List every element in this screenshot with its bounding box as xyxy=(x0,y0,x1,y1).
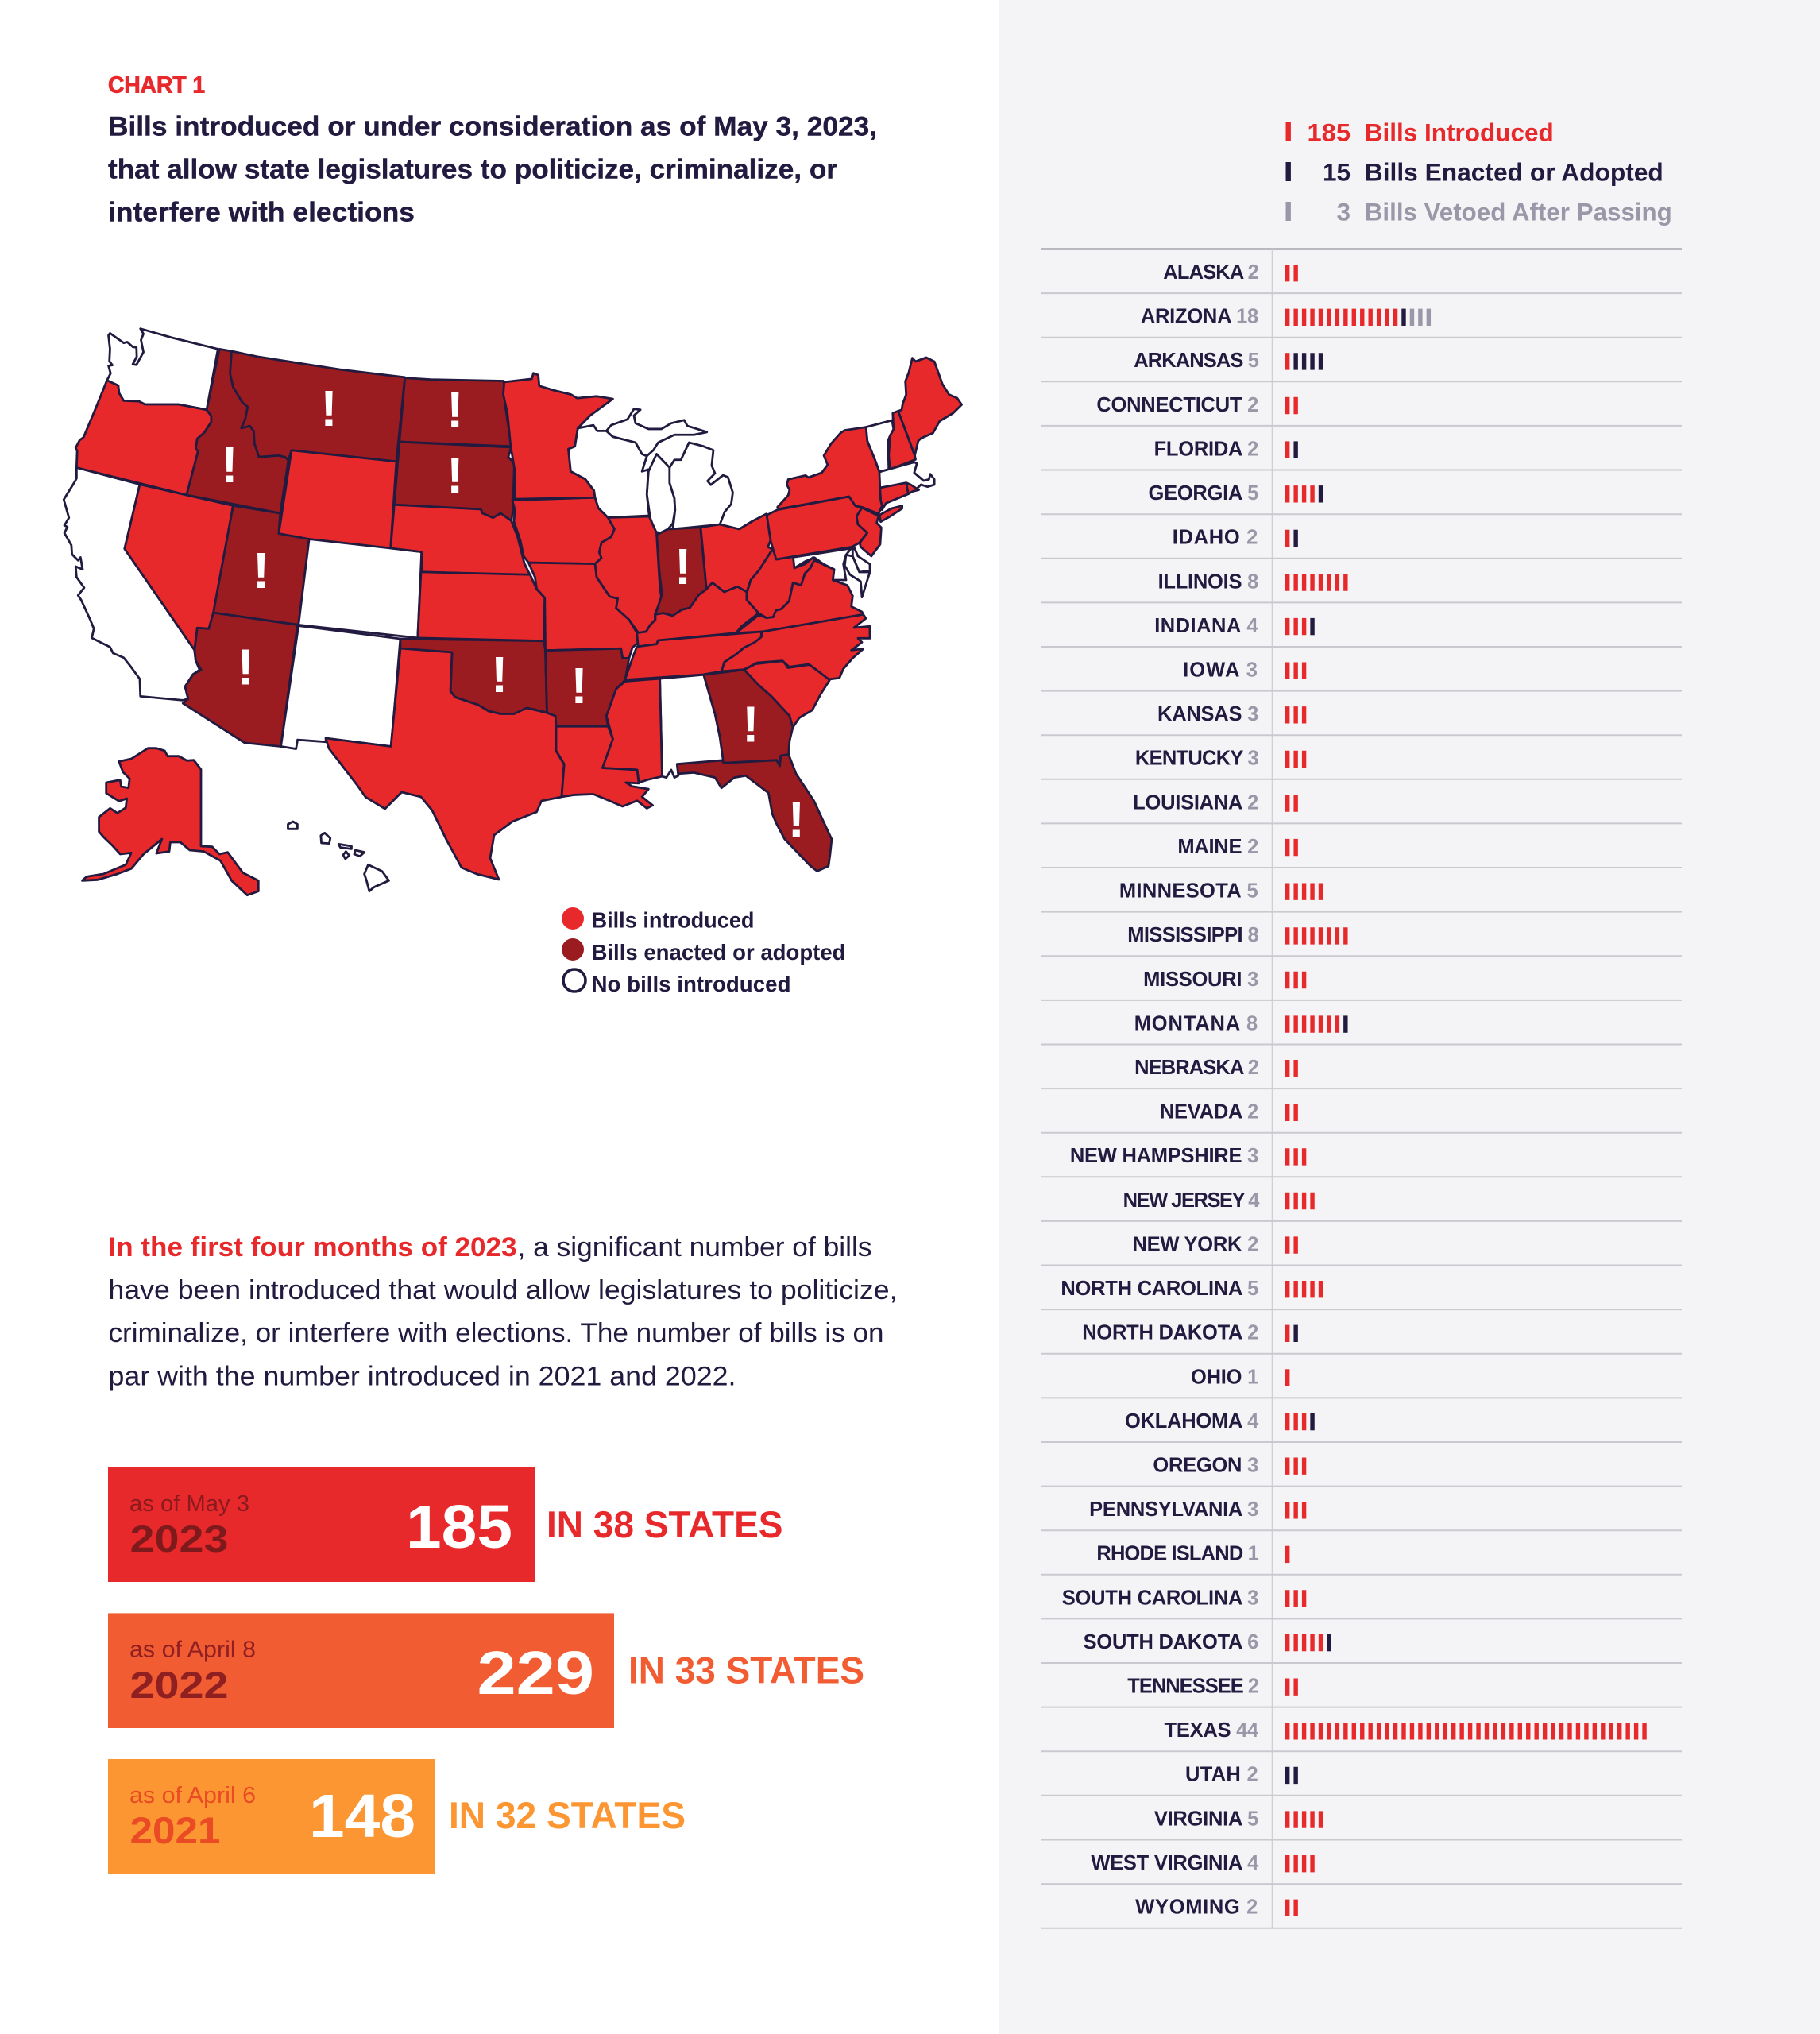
bar: 2021: as of April 6 xyxy=(129,1783,256,1808)
state: Nebraska xyxy=(391,505,530,575)
exclamation marks on enacted states: ! xyxy=(221,436,238,493)
bar: 2021: 2021 xyxy=(130,1809,221,1851)
map legend xyxy=(562,907,845,996)
northeastern states xyxy=(767,358,962,559)
state: Massachusetts xyxy=(879,462,934,490)
bar: 2022: 2022 xyxy=(130,1664,229,1706)
row: Virginia: VIRGINIA 5 xyxy=(1154,1808,1258,1830)
state: New York, Long Island xyxy=(879,506,902,522)
row: Arkansas: ARKANSAS 5 xyxy=(1134,350,1259,372)
exclamation marks on enacted states: ! xyxy=(320,380,338,437)
legend: bills vetoed after passing: Bills Vetoed After Passing xyxy=(1365,198,1672,226)
state: Illinois xyxy=(595,516,662,633)
state: Pennsylvania xyxy=(767,497,867,559)
state: North Carolina xyxy=(721,614,870,679)
row: New Jersey: NEW JERSEY 4 xyxy=(1123,1189,1260,1212)
state: Washington xyxy=(107,329,218,410)
legend: bills enacted or adopted: 15 xyxy=(1323,158,1351,187)
row: Minnesota: MINNESOTA 5 xyxy=(1119,880,1258,903)
western states xyxy=(64,329,547,749)
US map xyxy=(64,329,962,895)
state: California xyxy=(64,468,199,700)
row: Arizona: ARIZONA 18 xyxy=(1141,306,1258,328)
state: Texas xyxy=(326,648,564,880)
row: Montana: MONTANA 8 xyxy=(1134,1012,1258,1034)
row: South Dakota: SOUTH DAKOTA 6 xyxy=(1084,1631,1258,1653)
state: West Virginia xyxy=(747,550,824,618)
state: Nevada xyxy=(125,485,233,650)
state: Wyoming xyxy=(279,450,396,548)
exclamation marks on enacted states: ! xyxy=(491,646,508,703)
legend: bills introduced: Bills introduced xyxy=(591,908,755,933)
state: Rhode Island xyxy=(906,483,919,494)
legend: bills introduced: 185 xyxy=(1308,118,1351,147)
row: South Carolina: SOUTH CAROLINA 3 xyxy=(1062,1587,1258,1609)
state: Vermont xyxy=(866,420,894,472)
row: Nebraska: NEBRASKA 2 xyxy=(1134,1057,1259,1079)
state: Colorado xyxy=(299,539,422,638)
row: Idaho: IDAHO 2 xyxy=(1173,527,1258,549)
bar: 2022: 229 xyxy=(477,1639,594,1707)
paragraph xyxy=(108,1232,898,1391)
row: Indiana: INDIANA 4 xyxy=(1154,615,1258,637)
state: Mississippi xyxy=(602,679,662,783)
legend: no bills introduced: No bills introduced xyxy=(591,972,791,996)
panel: right side state list background xyxy=(999,0,1820,2034)
row: Maine: MAINE 2 xyxy=(1177,836,1258,858)
state: South Carolina xyxy=(744,661,830,728)
state: Michigan upper peninsula xyxy=(606,409,707,456)
bar: 2022: as of April 8 xyxy=(129,1637,256,1662)
row: Nevada: NEVADA 2 xyxy=(1160,1101,1258,1123)
state: Louisiana xyxy=(556,726,653,808)
row: Oregon: OREGON 3 xyxy=(1153,1454,1258,1476)
state: Ohio xyxy=(701,514,773,592)
state: Wisconsin xyxy=(569,425,649,517)
state: Utah xyxy=(214,505,309,625)
bar: 2022 xyxy=(108,1613,864,1728)
heading: interfere with elections xyxy=(108,197,415,227)
row: Iowa: IOWA 3 xyxy=(1183,659,1258,682)
paragraph: In the first four months of 2023 xyxy=(108,1232,516,1263)
state: Hawaii xyxy=(288,822,388,891)
state: Kentucky xyxy=(637,582,759,647)
bar: 2022: IN 33 STATES xyxy=(628,1649,864,1692)
row: Wyoming: WYOMING 2 xyxy=(1135,1897,1258,1919)
row: Oklahoma: OKLAHOMA 4 xyxy=(1125,1410,1259,1433)
bar: 2023 xyxy=(108,1467,783,1582)
state: Oregon xyxy=(75,381,211,495)
bar: 2021 xyxy=(108,1759,686,1874)
state: Minnesota xyxy=(503,373,612,499)
row: Louisiana: LOUISIANA 2 xyxy=(1133,791,1258,814)
paragraph: have been introduced that would allow legislatures to politicize, xyxy=(108,1275,898,1305)
row: North Carolina: NORTH CAROLINA 5 xyxy=(1061,1278,1258,1300)
row: Florida: FLORIDA 2 xyxy=(1154,438,1258,460)
state: Maine xyxy=(898,358,962,455)
state: Virginia xyxy=(736,560,864,633)
legend: bills enacted or adopted: Bills enacted or adopted xyxy=(591,940,845,965)
bar: 2021: IN 32 STATES xyxy=(449,1794,686,1836)
paragraph: par with the number introduced in 2021 and 2022. xyxy=(108,1361,736,1391)
row: New York: NEW YORK 2 xyxy=(1132,1233,1258,1255)
exclamation marks on enacted states: ! xyxy=(788,791,805,848)
state: Iowa xyxy=(512,497,614,564)
row: North Dakota: NORTH DAKOTA 2 xyxy=(1082,1322,1258,1344)
state: Kansas xyxy=(418,572,545,641)
row: Missouri: MISSOURI 3 xyxy=(1143,969,1258,991)
exclamation marks on enacted states: ! xyxy=(674,538,691,595)
bar: 2023: as of May 3 xyxy=(129,1491,249,1517)
row: Kansas: KANSAS 3 xyxy=(1157,703,1258,725)
state: Florida xyxy=(677,755,832,871)
state: Alaska xyxy=(83,748,258,895)
bar: 2023: 2023 xyxy=(130,1518,229,1560)
state: Idaho xyxy=(187,349,288,513)
Alaska and Hawaii xyxy=(83,748,388,895)
bar: 2023: 185 xyxy=(406,1493,512,1561)
row: Mississippi: MISSISSIPPI 8 xyxy=(1127,924,1258,946)
row: Texas: TEXAS 44 xyxy=(1165,1719,1259,1742)
legend: bills enacted or adopted: Bills Enacted or Adopted xyxy=(1365,158,1664,187)
bar: 2021: 148 xyxy=(309,1782,415,1850)
state: Missouri xyxy=(528,563,638,658)
exclamation marks on enacted states: ! xyxy=(446,447,463,504)
row: Rhode Island: RHODE ISLAND 1 xyxy=(1096,1543,1259,1565)
exclamation marks on enacted states: ! xyxy=(253,542,269,599)
state: Indiana xyxy=(655,528,706,616)
state: New Hampshire xyxy=(889,411,915,470)
state: Arkansas xyxy=(546,648,629,726)
heading xyxy=(108,112,877,227)
heading: Bills introduced or under consideration as of May 3, 2023, xyxy=(108,112,877,142)
state: Tennessee xyxy=(625,632,761,680)
tally legend xyxy=(1285,118,1672,226)
row: Kentucky: KENTUCKY 3 xyxy=(1135,748,1259,770)
bar: 2023: IN 38 STATES xyxy=(547,1503,783,1545)
row: Illinois: ILLINOIS 8 xyxy=(1158,570,1258,593)
paragraph: , a significant number of bills xyxy=(518,1232,872,1263)
heading: that allow state legislatures to politicize, criminalize, or xyxy=(108,154,837,184)
legend: bills introduced: Bills Introduced xyxy=(1365,118,1554,147)
exclamation marks on enacted states: ! xyxy=(742,696,759,753)
row: Georgia: GEORGIA 5 xyxy=(1148,482,1258,505)
state: North Dakota xyxy=(400,378,512,447)
eastern shore of Chesapeake Bay xyxy=(844,555,870,597)
state: Maryland xyxy=(792,548,852,580)
state: Connecticut xyxy=(880,483,908,510)
state: South Dakota xyxy=(394,442,514,521)
state: Michigan lower peninsula xyxy=(670,443,732,529)
state: Montana xyxy=(230,351,405,462)
state: Oklahoma xyxy=(400,639,547,714)
exclamation marks on enacted states: ! xyxy=(237,639,254,696)
row: Alaska: ALASKA 2 xyxy=(1163,261,1259,284)
row: Utah: UTAH 2 xyxy=(1185,1764,1258,1786)
exclamation marks on enacted states: ! xyxy=(446,381,463,439)
state: Delaware xyxy=(852,544,870,572)
legend: bills vetoed after passing: 3 xyxy=(1336,198,1351,226)
state tally table xyxy=(1041,249,1682,1928)
midwestern and southern states xyxy=(503,373,832,871)
state: Georgia xyxy=(704,670,793,766)
state: New Mexico xyxy=(281,626,400,749)
state: New Jersey xyxy=(856,508,881,556)
row: Ohio: OHIO 1 xyxy=(1191,1366,1258,1388)
central Atlantic and Ohio valley states xyxy=(625,514,870,680)
paragraph: criminalize, or interfere with elections. The number of bills is on xyxy=(108,1318,883,1348)
row: West Virginia: WEST VIRGINIA 4 xyxy=(1091,1852,1259,1874)
state: Arizona xyxy=(183,613,298,747)
state: New York xyxy=(778,427,882,514)
row: Pennsylvania: PENNSYLVANIA 3 xyxy=(1089,1498,1258,1521)
row: Tennessee: TENNESSEE 2 xyxy=(1127,1675,1259,1697)
lake Michigan shoreline xyxy=(647,454,675,533)
exclamation marks on enacted states xyxy=(221,380,805,848)
comparison bars xyxy=(108,1467,864,1874)
row: Connecticut: CONNECTICUT 2 xyxy=(1096,394,1258,416)
exclamation marks on enacted states: ! xyxy=(570,657,588,714)
row: New Hampshire: NEW HAMPSHIRE 3 xyxy=(1070,1145,1258,1167)
chart label: CHART 1 xyxy=(108,73,205,99)
state: Alabama xyxy=(660,675,723,778)
